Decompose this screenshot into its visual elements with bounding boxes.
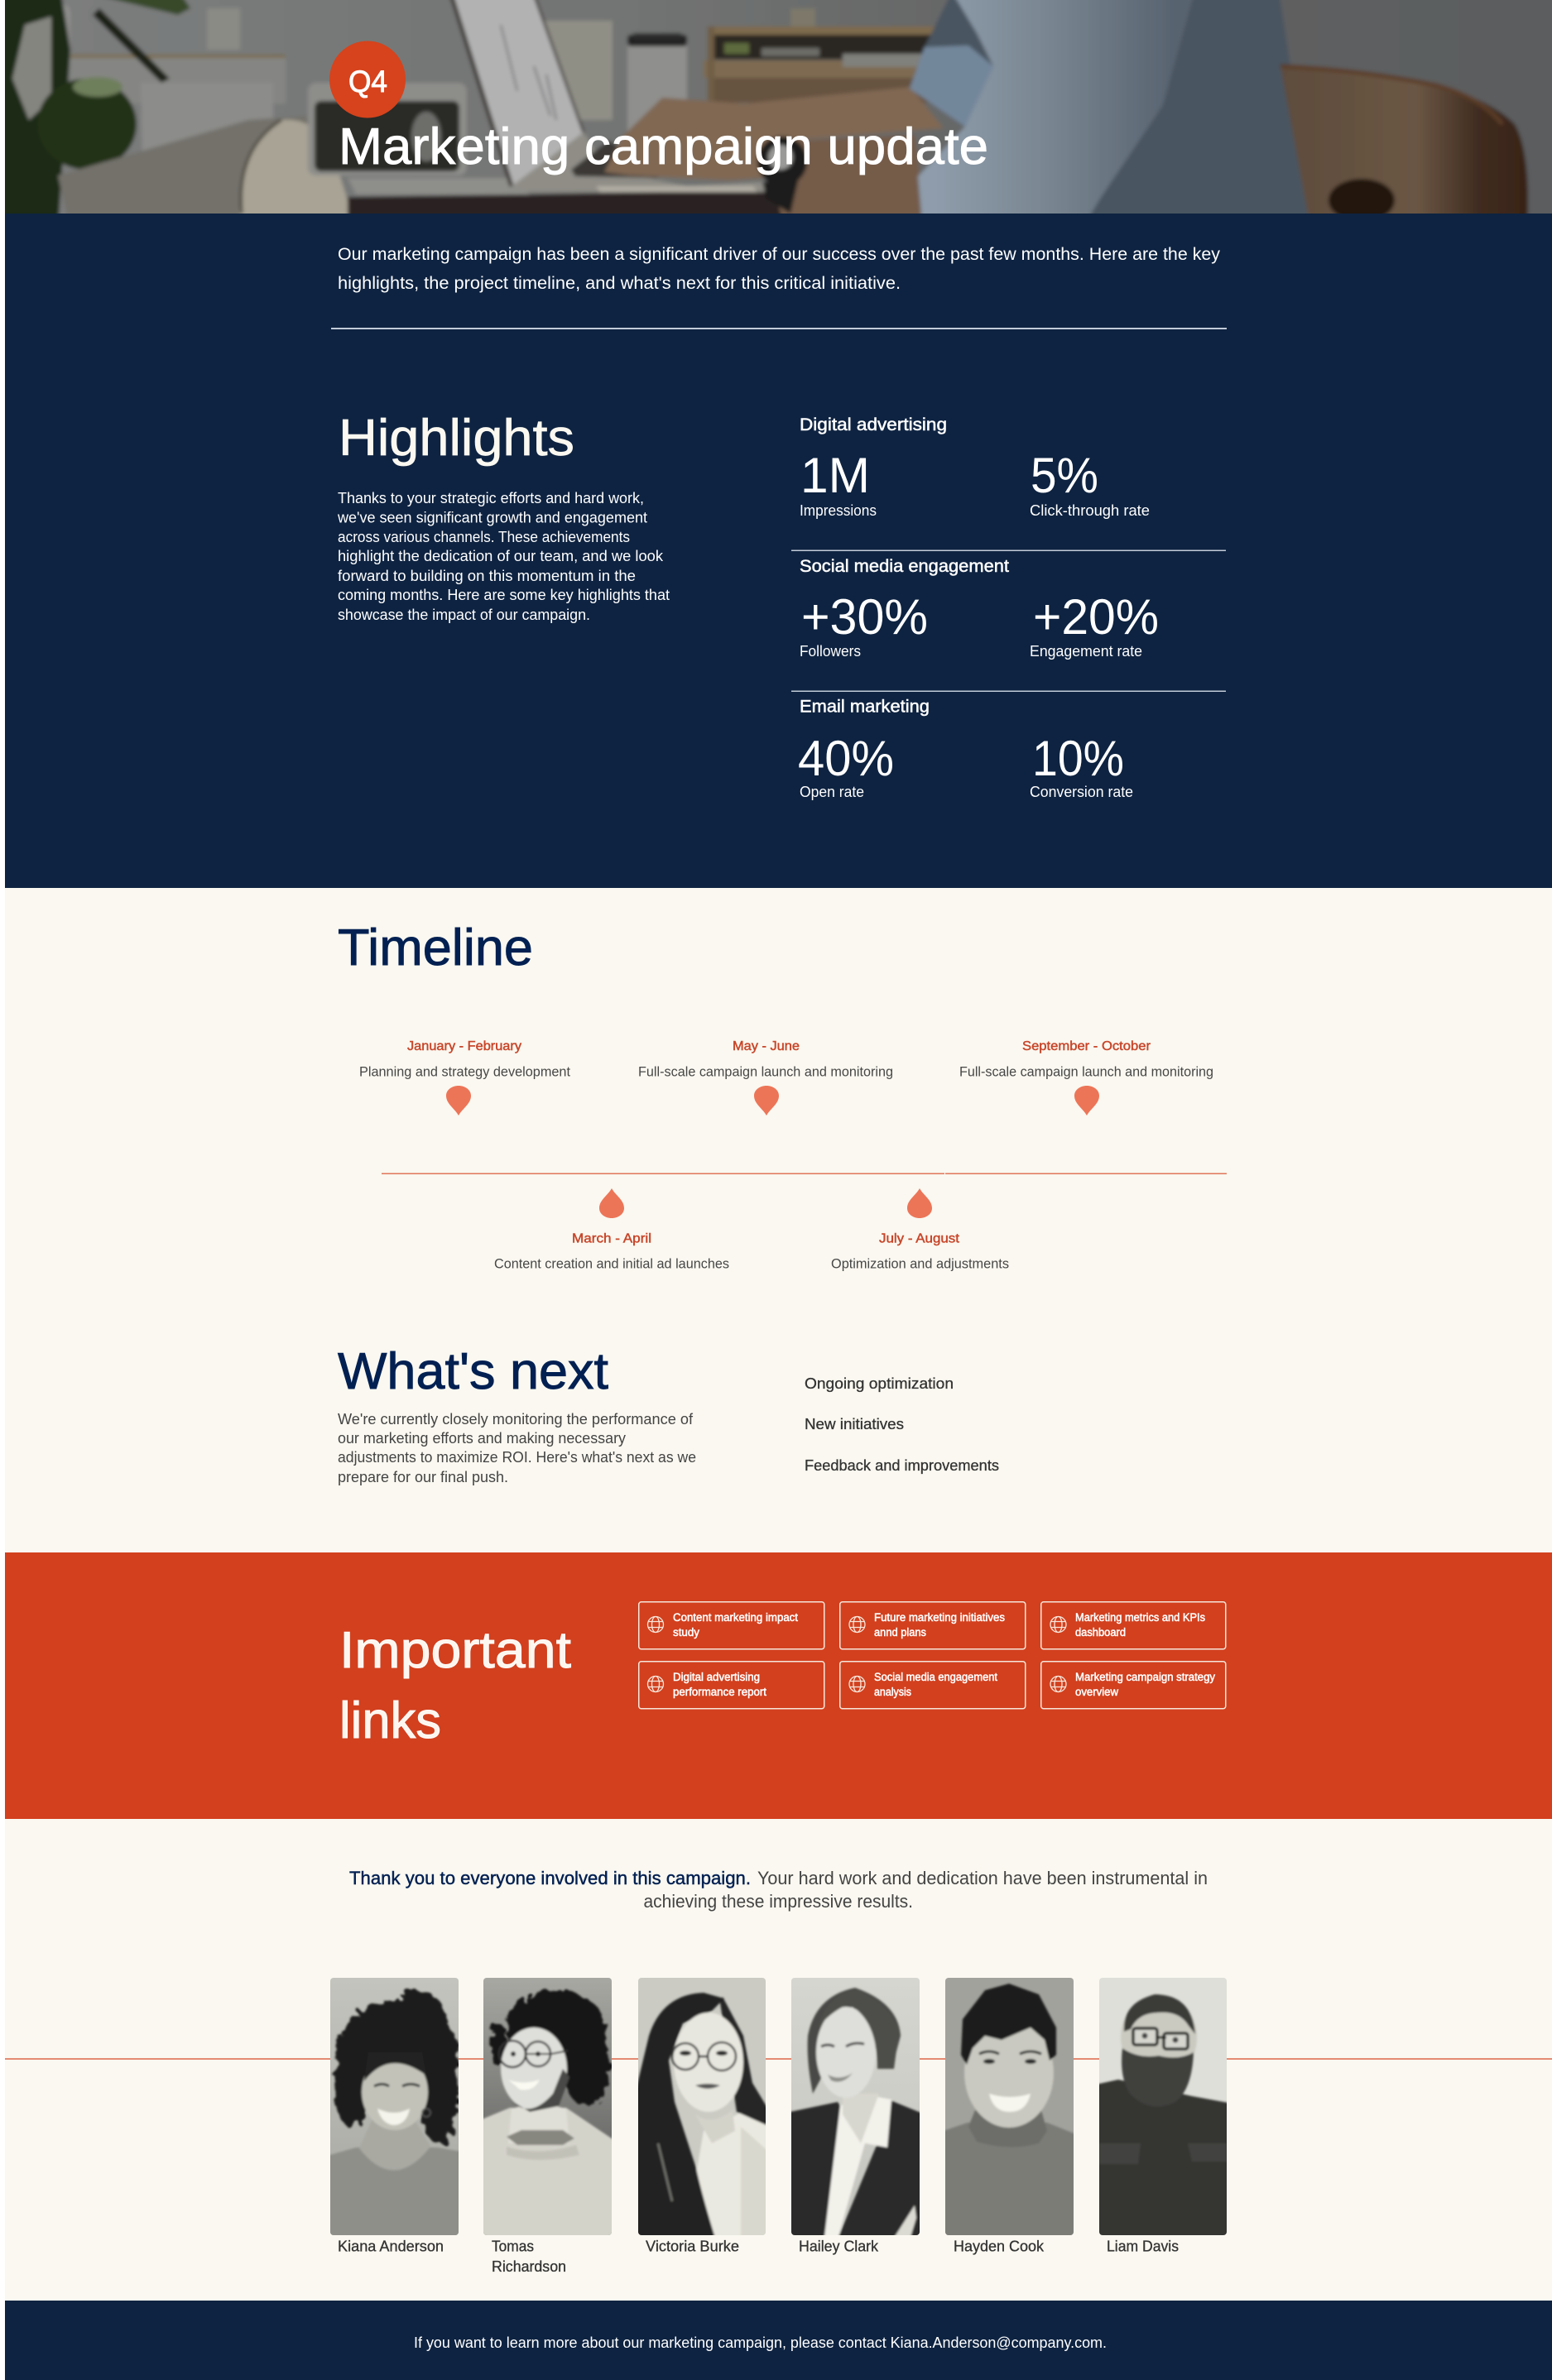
portrait: Kiana Anderson <box>330 1978 459 2235</box>
stats: digital advertising <box>800 415 1150 519</box>
text: contact line: If you want to learn more about our marketing campaign, please contact Kiana.Anderson@company.com. <box>414 2334 1107 2351</box>
stats: email marketing: 10% <box>1032 731 1124 786</box>
panel: hero photo header <box>0 0 1552 232</box>
link: content marketing impact study: Content marketing impact <box>673 1611 798 1624</box>
heading: Timeline: Timeline <box>338 919 533 976</box>
names: Victoria Burke <box>646 2238 739 2254</box>
list: next steps: Feedback and improvements <box>805 1457 999 1474</box>
milestone: September - October: Full-scale campaign launch and monitoring <box>959 1064 1213 1079</box>
names: Tomas <box>492 2238 534 2254</box>
stats: email marketing: Conversion rate <box>1030 784 1133 800</box>
stats: social media engagement <box>800 557 1159 660</box>
intro text: Our marketing campaign has been a significant driver of our success over the past few months. Here are the key <box>338 244 1220 264</box>
text: what's next description: We're currently closely monitoring the performance of <box>338 1410 694 1428</box>
text: thank you message <box>349 1868 1208 1912</box>
list: next steps: New initiatives <box>805 1416 904 1432</box>
stats: digital advertising: 5% <box>1031 448 1098 503</box>
stats: social media engagement: Social media engagement <box>800 557 1009 576</box>
milestone: September - October <box>959 1039 1213 1116</box>
link: campaign strategy overview: overview <box>1075 1686 1118 1698</box>
names: Kiana Anderson <box>338 2238 444 2254</box>
milestone: July - August <box>831 1188 1009 1271</box>
milestone: January - February <box>359 1039 570 1116</box>
link: marketing metrics dashboard <box>1041 1602 1226 1649</box>
text: highlights description <box>337 490 670 623</box>
link: digital advertising report: Digital advertising <box>673 1671 760 1683</box>
names: Hailey Clark <box>799 2238 879 2254</box>
heading: Important links: links <box>339 1692 441 1749</box>
link: future marketing initiatives <box>840 1602 1026 1649</box>
text: highlights description: coming months. Here are some key highlights that <box>338 587 670 603</box>
panel: footer <box>5 2301 1552 2380</box>
stats: digital advertising: Click-through rate <box>1030 502 1150 519</box>
link: digital advertising report: performance report <box>673 1686 766 1698</box>
stats: social media engagement: Followers <box>800 643 861 660</box>
milestone: January - February: Planning and strategy development <box>359 1064 570 1079</box>
names: Hayden Cook <box>954 2238 1045 2254</box>
portrait: Tomas Richardson <box>483 1978 612 2235</box>
milestone: January - February: January - February <box>407 1039 521 1053</box>
heading: Highlights: Highlights <box>339 410 574 467</box>
text: thank you message: achieving these impressive results. <box>644 1891 913 1912</box>
link: marketing metrics dashboard: dashboard <box>1075 1626 1126 1639</box>
link: digital advertising report <box>639 1662 824 1709</box>
title: Marketing campaign update <box>339 118 988 175</box>
panel: navy intro and highlights <box>5 214 1552 888</box>
milestone: May - June: May - June <box>733 1039 800 1053</box>
portrait: Hayden Cook <box>945 1978 1074 2235</box>
badge: Q4 <box>329 41 406 118</box>
text: thank you message: Your hard work and dedication have been instrumental in <box>757 1868 1208 1888</box>
names: Liam Davis <box>1107 2238 1179 2254</box>
text: highlights description: Thanks to your strategic efforts and hard work, <box>338 490 644 506</box>
panel: timeline <box>338 919 1227 1271</box>
stats: digital advertising: Impressions <box>800 502 877 519</box>
stats: email marketing: Email marketing <box>800 697 930 717</box>
intro text: highlights, the project timeline, and what's next for this critical initiative. <box>338 273 901 293</box>
text: what's next description: adjustments to maximize ROI. Here's what's next as we <box>338 1448 696 1466</box>
link: future marketing initiatives: annd plans <box>874 1626 926 1639</box>
stats: email marketing: Open rate <box>800 784 864 800</box>
milestone: July - August: Optimization and adjustments <box>831 1256 1009 1271</box>
text: highlights description: highlight the dedication of our team, and we look <box>338 548 664 564</box>
heading: Important links: Important <box>339 1622 571 1679</box>
stats: social media engagement: +30% <box>801 589 928 645</box>
milestone: September - October: September - October <box>1022 1039 1151 1053</box>
stats: social media engagement: Engagement rate <box>1030 643 1142 660</box>
link: marketing metrics dashboard: Marketing metrics and KPIs <box>1075 1611 1205 1624</box>
text: what's next description: prepare for our final push. <box>338 1468 508 1485</box>
link: social media analysis <box>840 1662 1026 1709</box>
heading: Important links <box>339 1622 571 1749</box>
names: Richardson <box>492 2258 566 2275</box>
stats: digital advertising: Digital advertising <box>800 415 947 434</box>
text: what's next description <box>338 1410 696 1485</box>
link: content marketing impact study <box>639 1602 824 1649</box>
text: thank you message: Thank you to everyone involved in this campaign. <box>349 1868 751 1888</box>
link: campaign strategy overview <box>1041 1662 1226 1709</box>
link: campaign strategy overview: Marketing campaign strategy <box>1075 1671 1215 1683</box>
names <box>338 2238 1179 2275</box>
stats: email marketing <box>798 697 1133 800</box>
milestone: May - June: Full-scale campaign launch and monitoring <box>638 1064 893 1079</box>
photo: person working at laptop <box>0 0 1552 232</box>
badge: Q4: Q4 <box>348 65 387 98</box>
heading: What's next: What's next <box>338 1343 608 1400</box>
intro text <box>338 244 1220 293</box>
portrait: Liam Davis <box>1099 1978 1227 2235</box>
milestone: May - June <box>638 1039 893 1116</box>
link: social media analysis: Social media engagement <box>874 1671 997 1683</box>
milestone: March - April: Content creation and initial ad launches <box>494 1256 729 1271</box>
portrait: Hailey Clark <box>791 1978 920 2235</box>
panel: what's next <box>338 1343 999 1485</box>
text: highlights description: we've seen significant growth and engagement <box>337 510 647 526</box>
list: next steps: Ongoing optimization <box>805 1375 954 1392</box>
list: next steps <box>805 1375 999 1474</box>
milestone: March - April <box>494 1188 729 1271</box>
panel: thank you and team <box>5 1868 1552 2275</box>
link: content marketing impact study: study <box>673 1626 699 1639</box>
text: highlights description: across various channels. These achievements <box>338 529 630 545</box>
text: highlights description: showcase the impact of our campaign. <box>338 607 590 623</box>
link: social media analysis: analysis <box>874 1686 911 1698</box>
text: what's next description: our marketing efforts and making necessary <box>338 1429 627 1447</box>
stats: digital advertising: 1M <box>800 448 870 503</box>
milestone: July - August: July - August <box>879 1231 960 1246</box>
stats: email marketing: 40% <box>798 731 894 786</box>
panel: important links <box>5 1552 1552 1819</box>
milestone: March - April: March - April <box>572 1231 651 1246</box>
stats: social media engagement: +20% <box>1033 589 1159 645</box>
link: future marketing initiatives: Future marketing initiatives <box>874 1611 1005 1624</box>
portrait: Victoria Burke <box>638 1978 766 2235</box>
text: highlights description: forward to building on this momentum in the <box>338 568 636 584</box>
